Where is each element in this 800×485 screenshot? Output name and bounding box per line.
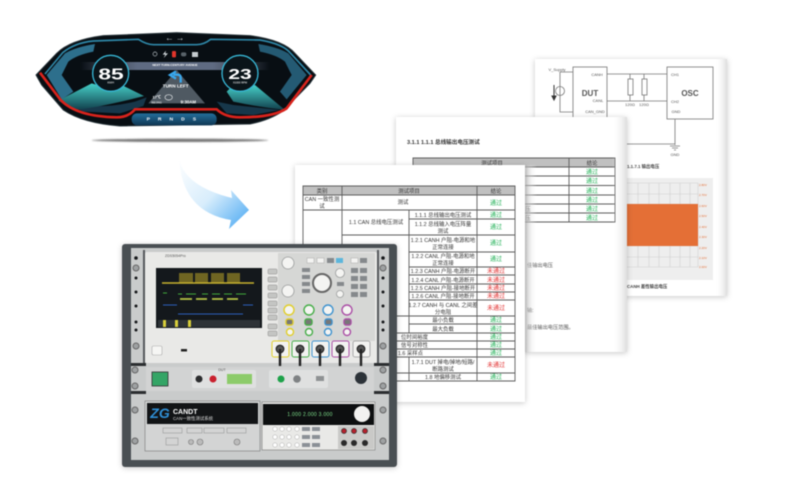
passed results: 通过 (490, 341, 502, 349)
test item cells: 正常连接 (432, 243, 454, 251)
light function keys (307, 258, 358, 263)
power supply meter (262, 402, 375, 450)
test item cells: 1.8 地偏移测试 (425, 373, 462, 381)
result values: 通过 (586, 214, 598, 222)
DUT box (573, 67, 607, 122)
temperature: 17℃ (152, 95, 161, 100)
test item cells: 1.2.6 CANL 户阻-接地断开 (411, 292, 475, 300)
can plate (269, 370, 328, 388)
dashboard body (36, 33, 316, 126)
passed results: 通过 (490, 349, 502, 357)
panel plate (146, 367, 374, 391)
top direction arrows: ←→ (165, 33, 186, 43)
axis labels: 2.70V (699, 193, 707, 197)
rack frame (122, 244, 397, 467)
ground symbol (670, 146, 680, 150)
test item cells: 1.6 采样点 (398, 349, 424, 357)
table header (303, 186, 515, 195)
failed results: 未通过 (487, 304, 505, 312)
power button (152, 346, 162, 355)
side dark strips (143, 250, 379, 365)
shadow from front page (525, 165, 537, 352)
rack inner (131, 248, 389, 460)
scope screen (156, 268, 262, 328)
speed gauge: 85 (98, 66, 124, 83)
test table (303, 186, 515, 381)
chart title: 1.1.7.1 输出电压 (627, 163, 660, 170)
DUT connector plate (192, 370, 256, 388)
curved blue arrow (179, 158, 249, 229)
grey BNC (293, 375, 301, 383)
front document: test table (295, 165, 525, 402)
circuit labels: CH2 (671, 99, 680, 104)
rail screws (132, 265, 386, 444)
left outer scale band (47, 44, 95, 99)
column headers: 结论 (491, 187, 502, 195)
test item cells: 1.2.3 CANH 户阻-电源断开 (411, 267, 476, 275)
test item cells: 最大负载 (432, 325, 454, 333)
passed results: 通过 (490, 333, 502, 341)
test item cells: 1.2.7 CANH 与 CANL 之间差 (408, 301, 478, 309)
circuit diagram (548, 67, 713, 157)
plot grid (600, 183, 698, 267)
red accent band (40, 73, 312, 117)
CANDT subtitle: CAN一致性测试系统 (173, 415, 214, 422)
results table (413, 158, 615, 222)
test item cells: 断路测试 (432, 365, 454, 373)
axis labels: 2.30V (699, 235, 707, 239)
right outer scale band (258, 44, 307, 99)
supply meter (556, 86, 564, 96)
test item cells: 1.1.2 总线输入电压阵量 (415, 220, 472, 228)
test item cells: 最小负载 (432, 316, 454, 324)
body text lines: 佳输出电压 (527, 261, 553, 269)
test rack instrument (122, 244, 397, 467)
meter display (263, 404, 374, 425)
speed gauge: KM/H (107, 80, 114, 84)
blue key (336, 258, 343, 263)
logo: ZG (149, 405, 170, 421)
right teal wedge (227, 85, 285, 110)
passed results: 通过 (490, 325, 502, 333)
test item cells: 1.7.1 DUT 掉电/掉地/短路/ (412, 358, 475, 366)
failed results: 未通过 (487, 292, 505, 300)
right control panel (278, 253, 375, 341)
control buttons (302, 258, 367, 297)
soft keys (268, 269, 277, 336)
test item cells (398, 211, 478, 381)
test item cells: 测试 (438, 227, 449, 235)
CANDT name: CANDT (173, 409, 198, 416)
body text lines: 输: (527, 306, 534, 314)
axis labels (699, 183, 707, 269)
yellow trace (162, 282, 254, 284)
lime trace (180, 298, 238, 300)
status icons (153, 51, 198, 58)
output terminal block (338, 426, 374, 449)
gear gauge: 23 (228, 67, 252, 83)
passed results: 通过 (490, 316, 502, 324)
middle panel (146, 349, 374, 391)
passed results: 通过 (490, 239, 502, 247)
turn left label: TURN LEFT (163, 84, 189, 89)
readings: 1.000 2.000 3.000 (287, 412, 333, 418)
result values: 通过 (586, 205, 598, 213)
green power button (152, 372, 168, 386)
passed results: 通过 (490, 211, 502, 219)
page edge shade (612, 117, 627, 352)
weather icon (165, 95, 172, 100)
axis labels: 2.40V (699, 225, 707, 229)
function keys (302, 427, 320, 447)
category and group cells (305, 195, 409, 226)
passed results: 通过 (490, 199, 502, 207)
page (295, 165, 525, 402)
header labels (481, 159, 598, 167)
axis labels: 2.60V (699, 204, 707, 208)
body text lines: 最佳输出电压范围。 (527, 323, 574, 331)
DUT label: DUT (218, 368, 226, 372)
meter body (262, 402, 375, 450)
test item cells: 1.2.2 CANL 户阻-电源和地 (411, 252, 475, 260)
test item cells: 1.2.1 CANH 户阻-电源和地 (411, 236, 476, 244)
city: BEIJING (151, 101, 162, 105)
next turn bar (80, 62, 270, 70)
middle document: bus voltage test (396, 117, 627, 352)
test item cells: 正常连接 (432, 259, 454, 267)
header labels: 测试项目 (481, 159, 503, 167)
scope body (145, 252, 377, 363)
green trace (163, 293, 246, 294)
black terminals (341, 440, 368, 446)
left teal wedge (58, 83, 144, 110)
green jack (278, 376, 284, 382)
table rules (303, 186, 515, 381)
round socket (355, 372, 367, 384)
category and group cells: 测试 (398, 198, 409, 206)
OSC label: OSC (681, 89, 699, 98)
failed results: 未通过 (487, 361, 505, 369)
axis labels: 2.20V (699, 246, 707, 250)
rail holes (134, 256, 385, 332)
circuit labels: CH1 (671, 72, 680, 77)
circuit labels: 120Ω (625, 102, 635, 107)
test item cells: 1.2.5 CANH 户阻-接地断开 (411, 284, 476, 292)
circuit labels: GND (671, 152, 680, 157)
orange voltage band (600, 204, 698, 246)
column headers (317, 187, 502, 195)
axis labels: 2.10V (699, 256, 707, 260)
keypad (273, 427, 299, 447)
test item cells: 1.2.4 CANL 户阻-电源断开 (411, 276, 475, 284)
clipped row text: 压 (525, 215, 531, 222)
oscilloscope (145, 252, 377, 363)
column headers: 测试项目 (398, 187, 420, 195)
chart background (600, 178, 713, 280)
circuit labels: 120Ω (639, 102, 649, 107)
CANDT front (145, 401, 260, 451)
channel controls (284, 305, 352, 336)
chart caption: CANH 差性输出电压 (627, 283, 668, 290)
passed results: 通过 (490, 223, 502, 231)
OSC box (667, 67, 713, 119)
circuit labels: CANH (591, 72, 603, 77)
red terminals (342, 428, 368, 434)
body text lines (527, 261, 574, 331)
red jack (210, 376, 216, 382)
yellow data blocks (179, 273, 240, 283)
test item cells: 1.1.1 总线输出电压测试 (415, 211, 472, 219)
db connector (316, 376, 324, 381)
main knobs (282, 257, 344, 298)
clock: 9:30AM (181, 100, 196, 105)
table rules (413, 158, 615, 222)
failed results: 未通过 (487, 284, 505, 292)
failed results (487, 267, 505, 369)
usb port (181, 349, 187, 352)
passed results (490, 199, 502, 381)
circuit labels: CANL (593, 98, 604, 103)
next turn label: NEXT TURN:CENTURY AVENUE (152, 63, 198, 67)
lower jacks (188, 439, 240, 445)
gear letters: PRNDS (147, 117, 204, 123)
test item cells: 位时间裕度 (401, 333, 429, 341)
category and group cells: 试 (319, 202, 325, 210)
output voltage chart (600, 178, 713, 280)
gear selector (132, 113, 217, 125)
passed results: 通过 (490, 373, 502, 381)
result values (586, 168, 598, 222)
DUT label: DUT (582, 89, 598, 98)
result values: 通过 (586, 168, 598, 176)
test item cells: 信号对称性 (401, 341, 429, 349)
turn arrow (170, 71, 181, 83)
panel corner brackets (131, 363, 389, 394)
back document: circuit and chart (535, 59, 727, 296)
result values: 通过 (586, 177, 598, 185)
column headers: 类别 (317, 187, 327, 195)
axis labels: 2.00V (699, 265, 707, 269)
top teal outline (45, 39, 311, 75)
wires (560, 72, 675, 145)
gear gauge (222, 55, 258, 91)
clipped row text: 压 (525, 206, 531, 213)
section heading: 3.1.1 1.1.1 总线输出电压测试 (407, 138, 480, 146)
gear gauge: X1000 RPM (233, 80, 247, 84)
cables (280, 349, 361, 366)
channel tags (163, 320, 191, 327)
DUT jacks (196, 376, 202, 382)
rotary knob (354, 406, 370, 422)
result values: 通过 (586, 187, 598, 195)
lower scale strip (67, 97, 280, 115)
input connectors (272, 341, 370, 357)
axis labels: 2.50V (699, 214, 707, 218)
failed results: 未通过 (487, 276, 505, 284)
axis labels: 2.80V (699, 183, 707, 187)
green terminal (227, 374, 252, 384)
scope brand: ZDS5054Pro (165, 254, 186, 258)
navigation triangle (148, 70, 205, 103)
circuit labels: CAN_GND (585, 109, 605, 114)
table header (413, 158, 615, 167)
page edge shade (715, 59, 727, 296)
current arrow (552, 85, 556, 100)
dashboard shadow (92, 139, 268, 142)
circuit labels: GND (672, 109, 681, 114)
category and group cells: CAN 一致性测 (305, 195, 339, 203)
page (396, 117, 627, 352)
passed results: 通过 (490, 255, 502, 263)
CANDT unit panel (145, 401, 260, 451)
lower labels (163, 428, 246, 445)
dashboard display (36, 33, 316, 142)
failed results: 未通过 (487, 267, 505, 275)
circuit labels: V_Supply (548, 67, 566, 72)
result values: 通过 (586, 196, 598, 204)
speed gauge (93, 55, 129, 91)
header labels: 结论 (587, 159, 598, 167)
status bar (158, 320, 260, 327)
blue trace (163, 305, 253, 314)
clipped row text (525, 206, 531, 222)
CANDT nameplate (147, 403, 258, 424)
resistors (628, 79, 647, 95)
circuit labels (548, 67, 681, 157)
category and group cells: 1.1 CAN 总线电压测试 (349, 218, 404, 226)
test item cells: 分电阻 (435, 308, 452, 316)
page (535, 59, 727, 296)
